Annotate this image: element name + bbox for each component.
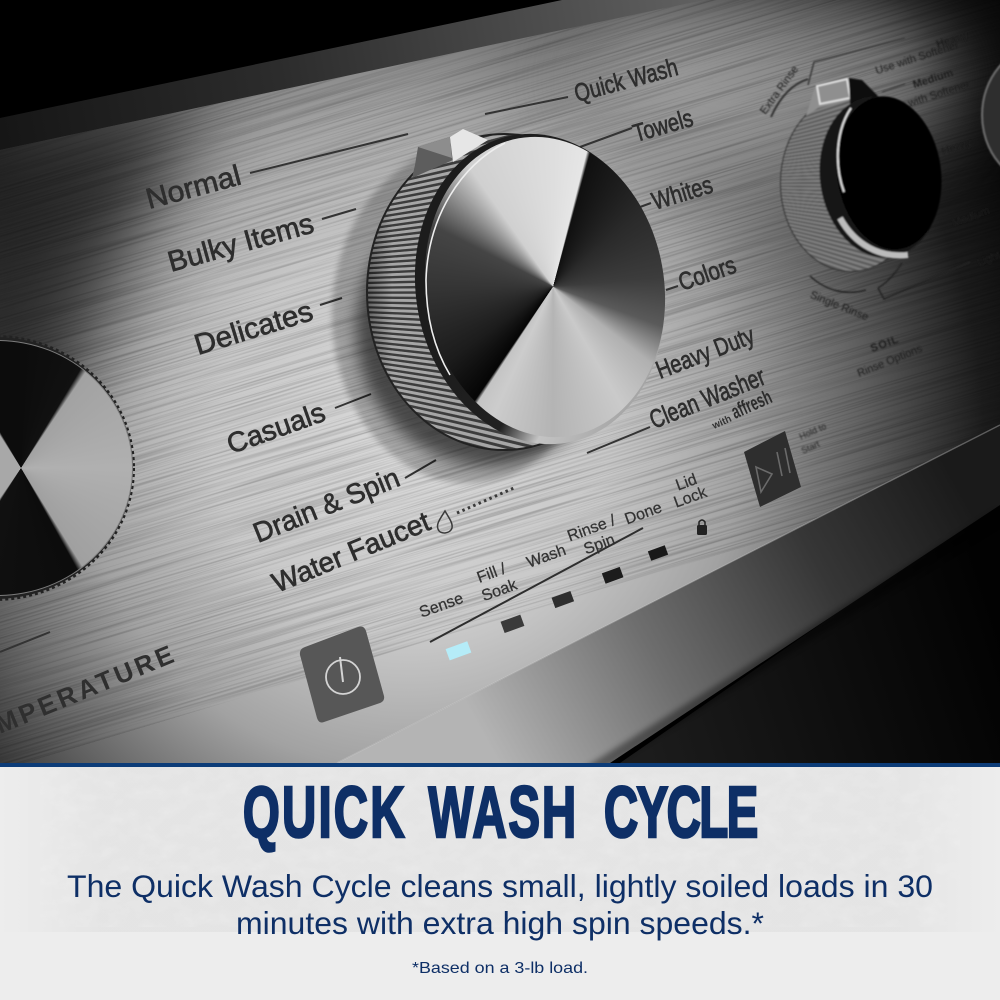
cycle labels right: Quick Wash <box>571 53 681 108</box>
title <box>243 772 758 852</box>
description: The Quick Wash Cycle cleans small, lightly soiled loads in 30 <box>67 868 933 904</box>
title: WASH <box>428 772 576 852</box>
status labels: Fill / <box>475 561 509 587</box>
dial bevel ring <box>414 134 665 444</box>
status labels <box>417 471 710 642</box>
cycle labels right: Towels <box>630 104 696 148</box>
cycle labels right: Heavy Duty <box>652 321 759 385</box>
status labels: Spin <box>582 531 617 558</box>
soil labels: SOIL <box>869 333 901 355</box>
blue rule <box>0 763 1000 767</box>
cycle labels left: Normal <box>143 160 245 216</box>
soil labels: Medium <box>911 67 955 91</box>
icon: water drop with dotted line <box>437 487 516 533</box>
cycle labels right: Whites <box>649 171 716 216</box>
soil dial ring <box>819 96 929 259</box>
soil dial face <box>836 96 942 250</box>
status labels: Sense <box>417 590 466 622</box>
cycle labels left: Water Faucet <box>267 506 435 599</box>
ribbed dial body <box>366 133 544 451</box>
status labels: Done <box>623 499 664 528</box>
cycle labels left: Drain & Spin <box>249 462 404 549</box>
soil dial pointer <box>806 78 878 116</box>
cycle labels left: Casuals <box>223 396 329 460</box>
status labels: Rinse / <box>565 512 618 545</box>
status labels: Lock <box>672 484 710 512</box>
start pause button <box>744 421 828 507</box>
cycle labels right: Colors <box>675 251 740 297</box>
cycle labels right: affresh <box>728 386 775 424</box>
start pause button: Start <box>800 439 822 456</box>
footnote: *Based on a 3-lb load. <box>412 960 588 977</box>
icon: lid lock <box>697 520 707 535</box>
cycle labels left <box>143 134 436 599</box>
far right dial edge <box>980 63 1000 167</box>
soil labels: Medium <box>951 205 991 230</box>
top bezel band <box>0 0 720 152</box>
status labels: Soak <box>479 576 520 605</box>
cycle labels right <box>485 53 775 453</box>
soil labels: Single Rinse <box>808 289 870 323</box>
soil labels <box>758 29 1000 380</box>
dial shadow <box>330 158 582 486</box>
title: CYCLE <box>604 772 758 852</box>
description <box>67 868 933 941</box>
left temperature knob <box>0 337 133 599</box>
start pause button: Hold to <box>798 421 828 442</box>
soil labels: Rinse Options <box>856 343 925 380</box>
dial face with conical finish <box>425 136 666 437</box>
cycle labels left: Delicates <box>191 295 317 362</box>
status labels: Wash <box>525 542 568 572</box>
photo: washer control panel <box>0 0 1000 790</box>
cycle labels left: Bulky Items <box>164 208 317 279</box>
soil labels: Extra Rinse <box>758 64 801 117</box>
cycle labels right: with <box>710 414 733 432</box>
title: QUICK <box>243 772 405 852</box>
soil labels: Heavy <box>935 29 970 51</box>
status lights <box>446 545 668 660</box>
soil dial and labels <box>758 29 1000 380</box>
soil labels: Use with Softener <box>874 39 961 77</box>
power button <box>300 626 384 722</box>
lower front strip <box>337 425 1000 790</box>
cycle labels right: Clean Washer <box>645 361 770 435</box>
brushed steel panel <box>0 0 1000 770</box>
soil labels: Heavy <box>940 136 974 158</box>
main cycle dial <box>330 129 666 486</box>
soil labels: with Softener <box>906 78 972 110</box>
caption panel <box>0 763 1000 1000</box>
description: minutes with extra high spin speeds.* <box>236 905 764 941</box>
dial rim highlight <box>426 143 505 375</box>
dial pointer <box>412 129 488 178</box>
soil dial body <box>779 100 889 272</box>
status labels: Lid <box>674 471 699 494</box>
